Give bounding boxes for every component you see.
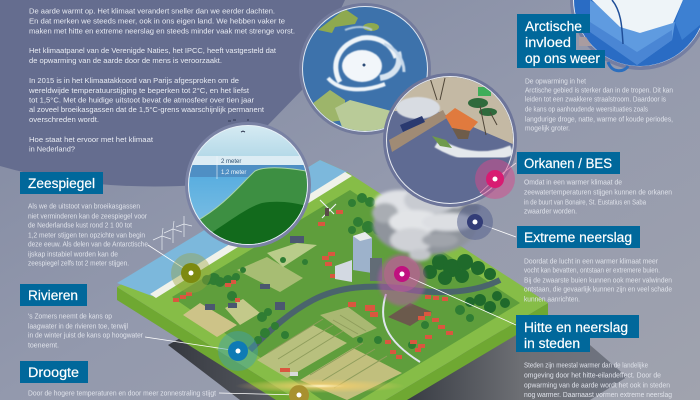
text: Hitte en neerslag in steden: [524, 362, 672, 399]
text: Zeespiegel: 1,2 meter stijgen ten opzichte van begin: [28, 232, 145, 240]
text: Arctische invloed: De opwarming in het: [525, 78, 586, 86]
heading: Hitte en neerslag in steden: Hitte en neerslag: [524, 320, 628, 336]
heading: Droogte: [20, 361, 88, 383]
text: Extreme neerslag: Bij de zwaarste buien kunnen ook meer valwinden: [524, 278, 672, 284]
heading: Rivieren: [20, 284, 87, 306]
city buildings: [335, 232, 382, 282]
heading: Zeespiegel: Zeespiegel: [28, 176, 95, 192]
text: Orkanen / BES: [524, 180, 672, 216]
hotspot: Droogte: [219, 385, 309, 400]
text: Arctische invloed: leiden tot een zwakkere straalstroom. Daardoor is: [525, 96, 666, 104]
intro text: Het klimaatpanel van de Verenigde Naties, het IPCC, heeft vastgesteld dat: [29, 46, 276, 55]
shadow of the landscape, left: [168, 337, 318, 400]
text: Zeespiegel: deze eeuw. Als delen van de Antarctische: [28, 242, 148, 248]
intro text: Hoe staat het ervoor met het klimaat: [29, 135, 153, 144]
beach: [150, 172, 352, 298]
river and road: [250, 280, 500, 350]
tan fields: [183, 299, 260, 337]
intro text: In 2015 is in het Klimaatakkoord van Parijs afgesproken om de: [29, 76, 239, 85]
heading: Droogte: Droogte: [28, 365, 79, 381]
text: Droogte: Door de hogere temperaturen en door meer zonnestraling stijgt: [28, 390, 216, 398]
intro text: overschreden wordt.: [29, 115, 99, 124]
heading: Orkanen / BES: [517, 152, 620, 174]
windmill: [320, 200, 336, 218]
text: Rivieren: in de winter juist de kans op hoogwater: [28, 332, 144, 340]
sun glare: [235, 379, 405, 393]
text: Zeespiegel: zeespiegel zelfs tot 2 meter stijgen.: [28, 260, 129, 268]
text: Extreme neerslag: ontstaan, die gevaarlijk kunnen zijn en veel schade: [524, 286, 672, 294]
hotspot: Extreme neerslag: [457, 204, 516, 240]
pink city heat haze: [378, 254, 426, 306]
heading: Hitte en neerslag in steden: [516, 315, 639, 352]
heading: Orkanen / BES: Orkanen / BES: [524, 156, 612, 172]
text: Arctische invloed: Arctische gebied is sterker dan in de tropen. Dit kan: [525, 88, 673, 94]
heading: Arctische invloed: Arctische: [525, 19, 582, 35]
intro text: wereldwijde temperatuurstijging te beperken tot 2°C, en het liefst: [28, 86, 249, 95]
text: Zeespiegel: niet verminderen kan de zeespiegel voor: [28, 214, 148, 220]
text: Extreme neerslag: kunnen aanrichten.: [524, 296, 580, 304]
text: Hitte en neerslag in steden: Steden zijn meestal warmer dan de landelijke: [524, 362, 648, 370]
hotspot: Orkanen: [475, 159, 516, 199]
inner land: [172, 190, 520, 400]
farm buildings: [205, 236, 304, 376]
text: Zeespiegel: de Nederlandse kust rond 2 1 00 tot: [28, 222, 132, 230]
road to the city: [383, 294, 420, 362]
circle: hurricane satellite view: [299, 3, 431, 135]
hotspot: Rivieren: [145, 331, 258, 371]
text: Orkanen / BES: zeewatertemperaturen stijgen kunnen de orkanen: [524, 190, 672, 196]
heading: Extreme neerslag: Extreme neerslag: [524, 230, 632, 246]
heading: Extreme neerslag: [517, 226, 640, 248]
circle: storm damage on island: [383, 73, 517, 207]
crop fields: [257, 303, 432, 400]
intro text: al zoveel broeikasgassen dat de 1,5°C-grens waarschijnlijk permanent: [29, 105, 264, 114]
panel: intro backdrop: [0, 0, 345, 186]
text: Rivieren: toeneemt.: [28, 342, 59, 350]
text: Extreme neerslag: vocht kan bevatten, ontstaan er extremere buien.: [524, 268, 660, 274]
intro text: De aarde warmt op. Het klimaat verandert sneller dan we eerder dachten.: [29, 6, 275, 16]
text: Rivieren: 's Zomers neemt de kans op: [28, 314, 112, 320]
hotspot: Zeespiegel: [148, 245, 211, 293]
text: Hitte en neerslag in steden: omgeving door het hitte-eilandeffect. Door de: [524, 372, 661, 380]
text: Arctische invloed: de kans op aanhoudende weersituaties zoals: [525, 106, 648, 114]
text: Extreme neerslag: [524, 258, 672, 304]
intro text: in Nederland?: [29, 144, 75, 154]
sea strip: [117, 160, 347, 296]
label: 1,2 meter: 1,2 meter: [221, 170, 246, 176]
heading: Rivieren: Rivieren: [28, 288, 78, 304]
intro text: de opwarming van de aarde door de mens is veroorzaakt.: [29, 56, 222, 65]
label: 2 meter: 2 meter: [221, 159, 241, 165]
intro text: tot 1,5°C. Met de huidige uitstoot bevat de atmosfeer over tien jaar: [29, 96, 255, 104]
text: Hitte en neerslag in steden: opwarming van de aarde wordt het ook in steden: [524, 382, 670, 390]
heading: Arctische invloed: invloed: [525, 35, 571, 51]
illustration: isometric Dutch landscape: [117, 160, 548, 400]
text: Rivieren: laagwater in de rivieren toe, terwijl: [28, 324, 128, 330]
text: Arctische invloed: langdurige droge, natte, warme of koude periodes,: [525, 116, 673, 124]
text: Zeespiegel: ijskap instabiel worden kan de: [28, 252, 118, 258]
birds: [228, 120, 249, 132]
heading: Arctische invloed: [517, 14, 605, 68]
landscape top surface: [117, 160, 548, 400]
circle: sea level rise diagram: [185, 122, 315, 252]
text: Zeespiegel: Als we de uitstoot van broeikasgassen: [28, 204, 140, 210]
circle: Arctic ice: [570, 0, 700, 71]
intro text: maken met hitte en extreme neerslag en steeds minder vaak met strenge vorst.: [29, 26, 295, 36]
dark forest: [423, 254, 510, 313]
text: Rivieren: [28, 314, 144, 350]
rain clouds: [372, 185, 480, 261]
text: Orkanen / BES: in de buurt van Bonaire, St. Eustatius en Saba: [524, 200, 646, 206]
intro text: En dat merken we steeds meer, ook in ons eigen land. We hebben vaker te: [29, 16, 285, 26]
arctic hook: [608, 62, 628, 71]
text: Hitte en neerslag in steden: nog warmer. Daarnaast vormen extreme neerslag: [524, 392, 672, 399]
heading: Zeespiegel: [20, 172, 103, 194]
pale green fields: [237, 243, 317, 292]
text: Arctische invloed: mogelijk groter.: [525, 126, 570, 132]
heading: Arctische invloed: op ons weer: [525, 51, 600, 67]
shadow of the landscape, right: [390, 330, 627, 400]
heading: Hitte en neerslag in steden: in steden: [524, 336, 580, 352]
text: Zeespiegel: [28, 204, 148, 268]
hotspot: Hitte en neerslag in steden: [384, 256, 516, 325]
intro text: [28, 6, 295, 154]
landscape side walls: [117, 287, 548, 400]
text: Orkanen / BES: zwaarder worden.: [524, 208, 577, 216]
wind turbines: [153, 216, 192, 250]
text: Orkanen / BES: Omdat in een warmer klimaat de: [524, 180, 622, 186]
text: Arctische invloed: [525, 78, 673, 132]
red-roofed houses: [173, 210, 453, 372]
text: Extreme neerslag: Doordat de lucht in een warmer klimaat meer: [524, 258, 659, 266]
trees: [202, 193, 474, 349]
